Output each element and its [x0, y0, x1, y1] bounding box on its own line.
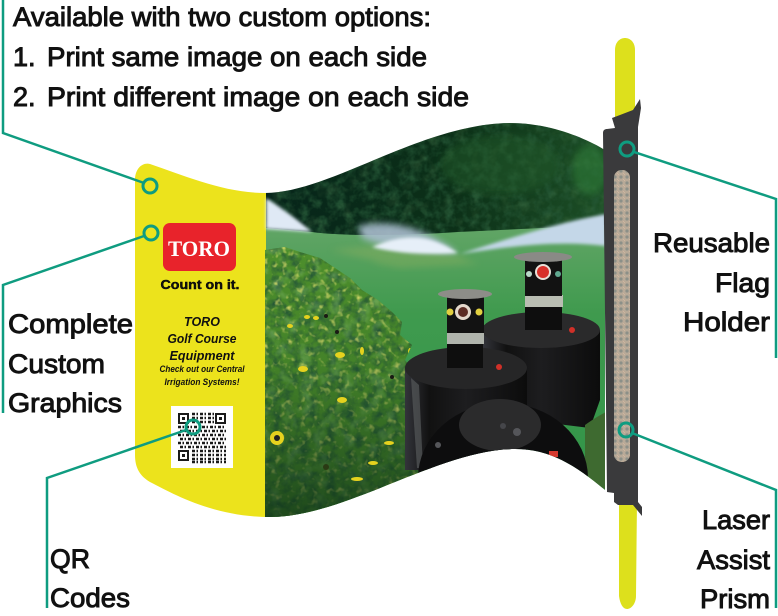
- rotor: open bowl: [418, 399, 588, 476]
- text block: TORO Golf Course Equipment: Irrigation Systems!: [164, 377, 240, 387]
- laser assist prism: [614, 170, 630, 462]
- water sprays: [266, 198, 606, 254]
- foliage: right edge: [585, 412, 606, 490]
- text block: TORO Golf Course Equipment: Golf Course: [168, 332, 237, 346]
- label: Reusable Flag Holder: Holder: [683, 307, 770, 337]
- callout: top option leader: [3, 0, 157, 193]
- photo: golf course scene: [265, 120, 608, 553]
- text block: TORO Golf Course Equipment: Equipment: [170, 349, 235, 363]
- label: Complete Custom Graphics: Graphics: [8, 388, 122, 418]
- label: QR Codes: [50, 544, 130, 613]
- rotor: front: [405, 289, 527, 470]
- callout: holder leader: [620, 142, 776, 358]
- label: QR Codes: QR: [50, 544, 90, 574]
- rotor: back: [482, 252, 600, 428]
- heading: custom options: [13, 2, 469, 112]
- label: Reusable Flag Holder: [653, 228, 770, 337]
- panel: yellow custom graphics background: [135, 164, 266, 517]
- callout: prism leader: [619, 423, 776, 608]
- heading: custom options: Available with two custom options:: [13, 2, 431, 32]
- forest: [266, 123, 604, 235]
- label: Laser Assist Prism: Laser: [702, 505, 770, 535]
- label: Complete Custom Graphics: [8, 309, 133, 418]
- label: Laser Assist Prism: Assist: [697, 545, 770, 575]
- fairway: [266, 225, 606, 522]
- label: Complete Custom Graphics: Custom: [8, 349, 105, 379]
- pole: lower yellow stake: [619, 500, 637, 609]
- label: Laser Assist Prism: Prism: [700, 584, 770, 614]
- label: QR Codes: Codes: [50, 583, 130, 613]
- tagline: Count on it: Count on it.: [160, 278, 240, 292]
- heading: custom options: Print same image on each side: [47, 42, 427, 72]
- text block: TORO Golf Course Equipment: [160, 315, 245, 387]
- label: Laser Assist Prism: [697, 505, 770, 614]
- heading: custom options: 1.: [13, 42, 36, 72]
- pole: upper yellow stake: [615, 38, 635, 120]
- callout: QR leader: [47, 420, 200, 608]
- callout: custom graphics leader: [3, 226, 158, 413]
- label: Reusable Flag Holder: Flag: [715, 268, 770, 298]
- heading: custom options: 2.: [13, 82, 36, 112]
- flag: printed panel: [135, 123, 605, 517]
- flag holder: [603, 99, 642, 516]
- text block: TORO Golf Course Equipment: Check out our Central: [160, 364, 245, 374]
- logo: TORO: TORO: [168, 236, 230, 261]
- logo: TORO: [163, 223, 236, 271]
- heading: custom options: Print different image on each side: [47, 82, 469, 112]
- text block: TORO Golf Course Equipment: TORO: [184, 315, 220, 329]
- label: Reusable Flag Holder: Reusable: [653, 228, 770, 258]
- label: Complete Custom Graphics: Complete: [8, 309, 133, 339]
- QR code: [171, 406, 233, 468]
- foliage with flowers: [265, 245, 435, 530]
